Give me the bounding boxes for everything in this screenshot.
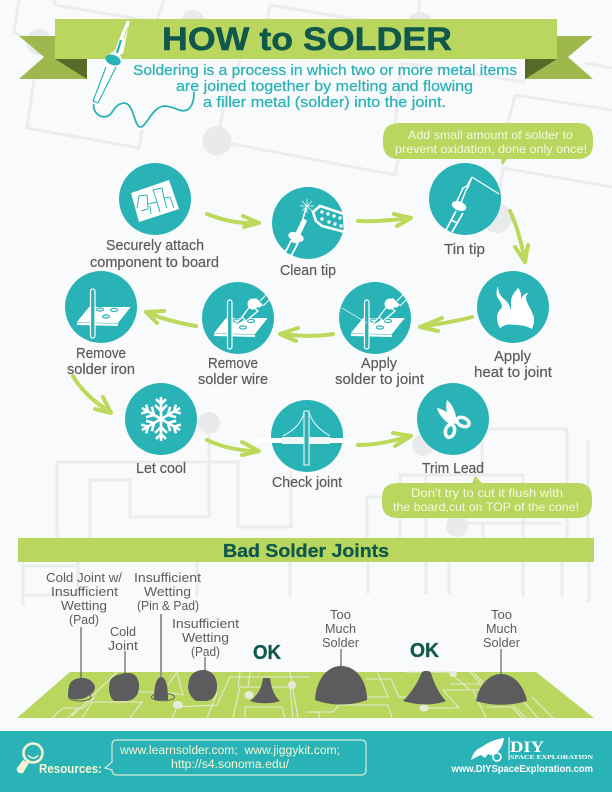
step: remove solder iron: solder iron	[67, 362, 135, 378]
joint: cold joint: Joint	[108, 639, 139, 653]
joint: cold joint with insufficient wetting: Cold Joint w/	[46, 571, 123, 585]
intro text: are joined together by melting and flowing	[176, 78, 473, 95]
step: remove solder wire	[198, 282, 274, 388]
section heading: bad solder joints	[18, 538, 594, 562]
joint: too much solder: Too	[330, 608, 351, 622]
joint: cold joint with insufficient wetting	[46, 571, 123, 701]
joint: cold joint with insufficient wetting: Insufficient	[51, 585, 119, 599]
icon: board with pin	[77, 289, 131, 338]
step: check joint	[256, 400, 356, 491]
arrow: check to trim	[358, 433, 411, 446]
icon: iron with solder wire	[446, 177, 499, 232]
joint: cold joint	[108, 625, 139, 701]
arrow: attach to clean	[207, 214, 259, 227]
arrow: wire to iron	[146, 311, 196, 326]
callout: tin tip: prevent oxidation, done only once!	[395, 142, 587, 156]
arrow: clean to tin	[358, 214, 411, 226]
joint: too much solder: Much	[325, 622, 356, 636]
logo: DIY Space Exploration: www.DIYSpaceExploration.com	[451, 763, 593, 775]
callout: trim lead: the board,cut on TOP of the cone!	[393, 500, 579, 514]
title: HOW to SOLDER	[162, 21, 452, 57]
resources bubble: www.learnsolder.com; www.jiggykit.com;	[119, 745, 340, 757]
resources bubble	[105, 740, 366, 775]
step: apply solder to joint: solder to joint	[335, 372, 424, 388]
step: remove solder iron	[65, 271, 137, 378]
joint: OK: OK	[410, 640, 440, 662]
icon: scissors	[437, 400, 471, 438]
step: apply heat to joint: heat to joint	[474, 365, 552, 381]
step: securely attach component to board: Securely attach	[106, 238, 204, 254]
step: trim lead	[417, 383, 489, 477]
joint: too much solder	[315, 608, 367, 704]
step: remove solder iron: Remove	[76, 346, 126, 362]
step: remove solder wire: solder wire	[198, 372, 268, 388]
step: apply heat to joint: Apply	[494, 349, 532, 365]
icon: magnifying glass	[17, 744, 42, 773]
logo: DIY Space Exploration: DIY	[510, 739, 545, 756]
callout: trim lead	[382, 476, 592, 518]
step: clean tip: Clean tip	[280, 263, 336, 279]
arrow: heat to apply	[420, 317, 472, 331]
step: let cool	[125, 383, 197, 477]
step: securely attach component to board: component to board	[90, 255, 219, 271]
joint: insufficient wetting pin and pad	[134, 571, 202, 701]
step: let cool: Let cool	[136, 461, 186, 477]
resources bubble: http://s4.sonoma.edu/	[171, 759, 290, 771]
resources label: Resources:	[39, 761, 102, 776]
footer band	[0, 731, 612, 792]
step: clean tip	[272, 187, 345, 279]
arrow: iron to cool	[73, 376, 111, 413]
background circuit pattern	[14, 0, 612, 606]
joint: insufficient wetting pin and pad: Insufficient	[134, 571, 202, 585]
logo: DIY Space Exploration: SPACE EXPLORATION	[510, 754, 593, 761]
icon: board, iron and wire	[342, 293, 407, 349]
step: apply solder to joint: Apply	[361, 356, 398, 372]
callout: tin tip	[383, 123, 593, 166]
arrow: apply to remove wire	[280, 328, 333, 341]
icon: flame	[496, 286, 534, 329]
logo: DIY Space Exploration	[451, 737, 593, 775]
joint: too much solder	[476, 608, 527, 705]
step: tin tip	[429, 163, 501, 258]
joint: too much solder: Much	[486, 622, 517, 636]
joint: too much solder: Solder	[483, 636, 520, 650]
circuit board plane	[17, 671, 594, 718]
step: trim lead: Trim Lead	[422, 461, 484, 477]
step: remove solder wire: Remove	[208, 356, 258, 372]
joint: insufficient wetting pin and pad: (Pin & Pad)	[137, 599, 199, 613]
callout: trim lead: Don't try to cut it flush with	[411, 486, 563, 500]
callout: tin tip: Add small amount of solder to	[408, 128, 573, 142]
joint: insufficient wetting pad: Insufficient	[172, 617, 240, 631]
intro text: Soldering is a process in which two or more metal items	[133, 62, 517, 79]
section heading: bad solder joints: Bad Solder Joints	[223, 541, 389, 561]
joint: OK	[250, 642, 282, 703]
joint: too much solder: Too	[491, 608, 512, 622]
joint: cold joint with insufficient wetting: Wetting	[61, 599, 107, 613]
icon: solder joint cross-section	[256, 411, 356, 465]
icon: soldering iron with cable	[92, 22, 194, 127]
flow arrows	[73, 211, 528, 455]
step: securely attach component to board	[90, 163, 219, 271]
step: apply heat to joint	[474, 271, 552, 381]
joint: OK	[403, 640, 446, 704]
step: check joint: Check joint	[272, 475, 342, 491]
icon: circuit board	[131, 180, 179, 222]
title ribbon	[19, 19, 593, 79]
arrow: cool to check	[207, 440, 259, 455]
joint: OK: OK	[253, 642, 282, 664]
joint: cold joint: Cold	[110, 625, 136, 639]
joint: insufficient wetting pad	[172, 617, 240, 701]
step: tin tip: Tin tip	[444, 242, 485, 258]
joint: cold joint with insufficient wetting: (Pad)	[69, 613, 99, 627]
intro text: a filler metal (solder) into the joint.	[203, 94, 446, 111]
icon: snowflake	[139, 397, 183, 441]
step: apply solder to joint	[335, 282, 424, 388]
intro text	[133, 62, 517, 111]
icon: board and iron	[214, 293, 270, 349]
arrow: tin to heat	[510, 211, 528, 262]
joint: too much solder: Solder	[322, 636, 359, 650]
joint: insufficient wetting pin and pad: Wetting	[144, 585, 191, 599]
joint: insufficient wetting pad: Wetting	[182, 631, 229, 645]
joint: insufficient wetting pad: (Pad)	[191, 645, 220, 659]
icon: iron and sponge	[285, 199, 345, 256]
